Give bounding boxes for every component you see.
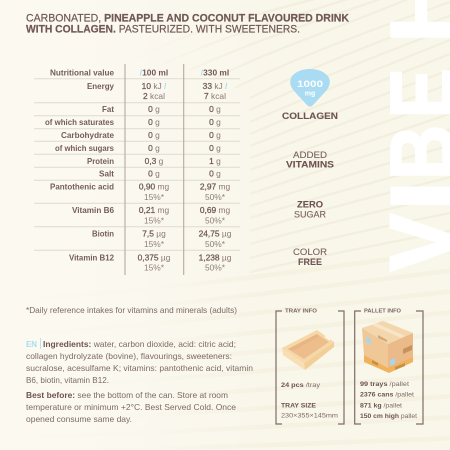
claim: zero sugar: SUGAR xyxy=(294,210,326,220)
ingredients text: Ingredients: water, carbon dioxide, acid: citric acid; xyxy=(43,339,236,349)
title xyxy=(26,12,349,36)
column: per 100 ml: 15%* xyxy=(144,216,165,226)
row labels: Salt xyxy=(99,169,114,179)
column: per 330 ml: 50%* xyxy=(205,192,226,202)
claim: collagen: COLLAGEN xyxy=(282,111,338,121)
icon: tray xyxy=(282,330,334,370)
claim: color free: FREE xyxy=(298,257,322,267)
panel: tray info: TRAY SIZE xyxy=(281,403,317,410)
column: per 330 ml: 0 g xyxy=(209,104,221,114)
row labels: Pantothenic acid xyxy=(50,182,114,192)
column: per 100 ml: 0 g xyxy=(148,117,160,127)
column: per 100 ml: 15%* xyxy=(144,239,165,249)
column: per 330 ml: 24,75 µg xyxy=(199,229,232,239)
title: WITH COLLAGEN. PASTEURIZED. WITH SWEETENERS. xyxy=(26,24,300,36)
claim: color free: COLOR xyxy=(293,247,328,257)
ingredients text: B6, biotin, vitamin B12. xyxy=(26,375,109,385)
title: CARBONATED, PINEAPPLE AND COCONUT FLAVOURED DRINK xyxy=(26,12,349,24)
column: per 100 ml: 0 g xyxy=(148,104,160,114)
column: per 330 ml: 7 kcal xyxy=(204,91,226,101)
column: per 100 ml: 0,90 mg xyxy=(139,182,169,192)
claim: color free xyxy=(293,247,328,267)
nutrition table xyxy=(34,64,240,275)
column: per 330 ml: 1,238 µg xyxy=(199,252,232,262)
panel: pallet info: 99 trays /pallet xyxy=(360,381,409,388)
row labels: Nutritional value xyxy=(50,68,114,78)
panel: tray info: 230×355×145mm xyxy=(281,413,338,420)
row labels: of which sugars xyxy=(55,143,114,153)
column: per 100 ml: 0,375 µg xyxy=(138,252,171,262)
column: per 330 ml: 0 g xyxy=(209,117,221,127)
claim: zero sugar xyxy=(294,200,326,220)
column: per 330 ml xyxy=(199,68,232,273)
column: per 100 ml: 0,21 mg xyxy=(139,205,169,215)
row labels: Carbohydrate xyxy=(61,130,114,140)
column: per 100 ml: 15%* xyxy=(144,192,165,202)
column: per 330 ml: 0 g xyxy=(209,143,221,153)
column: per 330 ml: 33 kJ / xyxy=(203,81,228,91)
claim: added vitamins xyxy=(286,150,334,170)
row labels: Energy xyxy=(87,81,114,91)
row labels: of which saturates xyxy=(45,117,114,127)
column: per 100 ml: 15%* xyxy=(144,263,165,273)
column: per 330 ml: 0 g xyxy=(209,130,221,140)
panel: tray info: TRAY INFO xyxy=(285,308,317,314)
column: per 100 ml: 7,5 µg xyxy=(142,229,166,239)
column: per 330 ml: 50%* xyxy=(205,263,226,273)
column: per 330 ml: 50%* xyxy=(205,216,226,226)
footnote: *Daily reference intakes for vitamins and minerals (adults) xyxy=(26,305,237,315)
column: per 100 ml: 0 g xyxy=(148,169,160,179)
panel: pallet info: 2376 cans /pallet xyxy=(360,392,414,399)
column: per 330 ml: 50%* xyxy=(205,239,226,249)
column: per 330 ml: 1 g xyxy=(209,156,221,166)
column: per 100 ml: 0 g xyxy=(148,130,160,140)
ingredients text xyxy=(26,338,253,424)
panel: tray info: 24 pcs /tray xyxy=(281,382,321,389)
column: per 330 ml: 0,69 mg xyxy=(200,205,230,215)
ingredients text: temperature or minimum +2°C. Best Served Cold. Once xyxy=(26,402,236,412)
row labels: Fat xyxy=(102,104,114,114)
column: per 100 ml xyxy=(138,68,171,273)
icon: collagen droplet badge: 1000 xyxy=(297,79,323,90)
column: per 330 ml: 0 g xyxy=(209,169,221,179)
column: per 330 ml: /330 ml xyxy=(201,68,229,78)
claim: zero sugar: ZERO xyxy=(297,200,323,210)
ingredients text: Best before: see the bottom of the can. Store at room xyxy=(26,390,228,400)
panel: pallet info: 150 cm high pallet xyxy=(360,413,417,420)
row labels: Vitamin B6 xyxy=(72,205,114,215)
column: per 100 ml: /100 ml xyxy=(140,68,168,78)
icon: boxed pallet xyxy=(362,321,413,373)
panel: pallet info: PALLET INFO xyxy=(364,308,401,314)
row labels: Protein xyxy=(87,156,114,166)
column: per 100 ml: 0,3 g xyxy=(145,156,164,166)
icon: collagen droplet badge xyxy=(290,69,330,107)
column: per 330 ml: 2,97 mg xyxy=(200,182,230,192)
ingredients text: sucralose, acesulfame K; vitamins: pantothenic acid, vitamin xyxy=(26,363,253,373)
claim: added vitamins: ADDED xyxy=(293,150,328,160)
column: per 100 ml: 10 kJ / xyxy=(142,81,167,91)
column: per 100 ml: 0 g xyxy=(148,143,160,153)
panel: tray info xyxy=(276,308,344,424)
ingredients text: EN xyxy=(26,339,37,349)
panel: pallet info: 871 kg /pallet xyxy=(360,402,402,409)
column: per 100 ml: 2 kcal xyxy=(143,91,165,101)
row labels xyxy=(45,68,114,262)
big rotated brand word xyxy=(371,0,450,271)
icon: collagen droplet badge: mg xyxy=(305,90,315,98)
claim: added vitamins: VITAMINS xyxy=(286,160,334,170)
row labels: Vitamin B12 xyxy=(69,252,114,262)
row labels: Biotin xyxy=(92,229,114,239)
panel: pallet info xyxy=(355,308,423,424)
ingredients text: opened consume same day. xyxy=(26,414,132,424)
ingredients text: collagen hydrolyzate (bovine), flavourings, sweeteners: xyxy=(26,351,232,361)
